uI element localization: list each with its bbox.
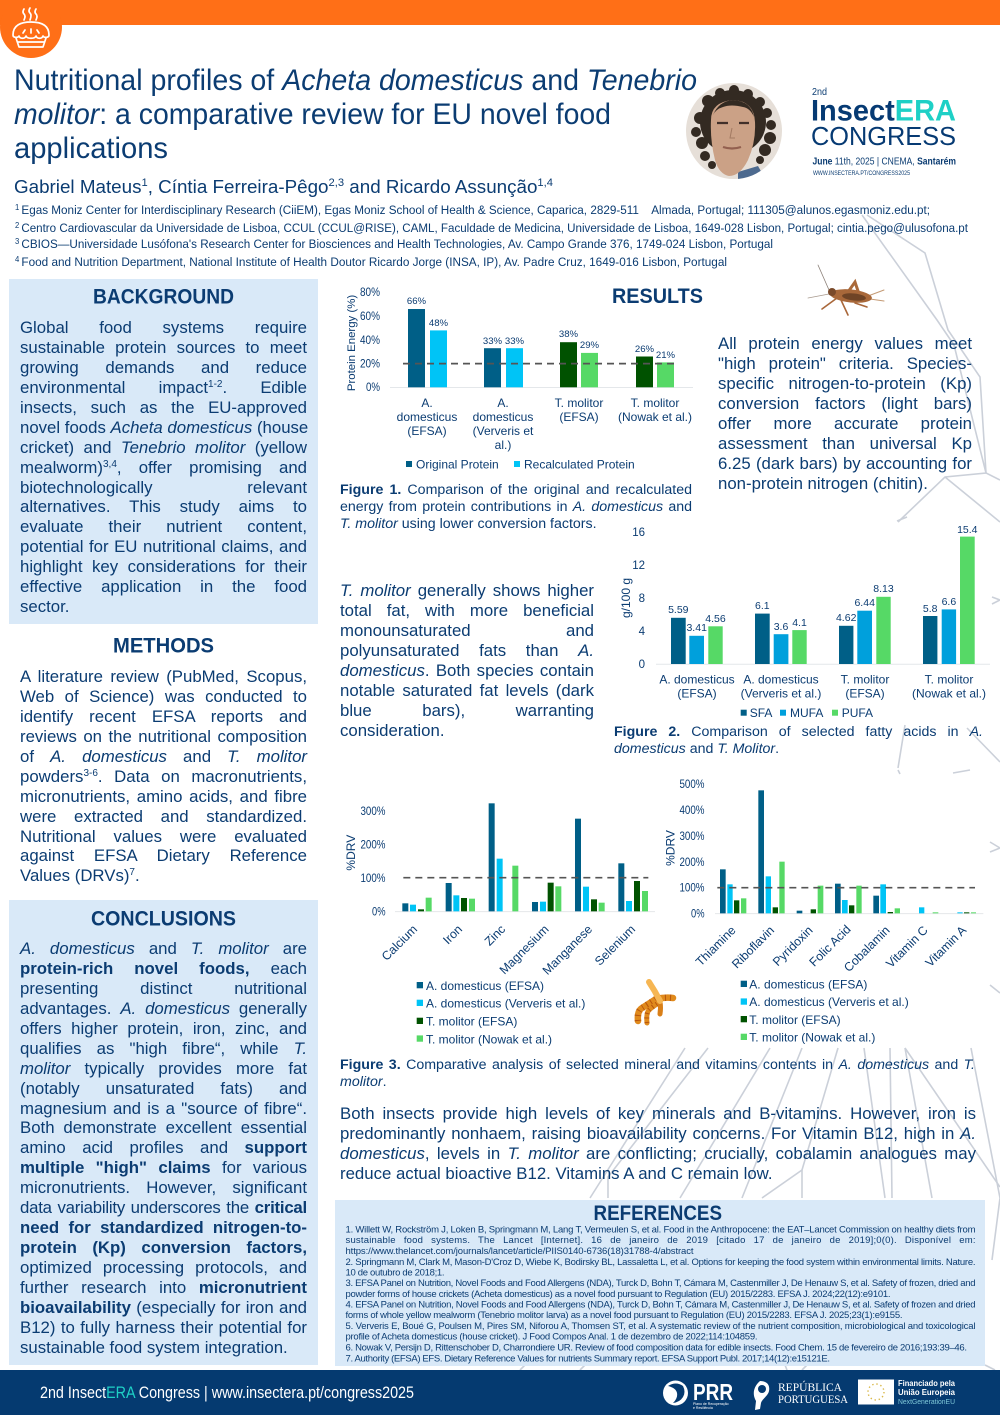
category labels: T. molitor (555, 396, 603, 410)
value labels: 26% (635, 344, 655, 355)
methods text: were extracted and standardized. (20, 807, 307, 826)
legend: Recalculated Protein (524, 458, 635, 472)
figure 1 caption (340, 482, 692, 532)
category labels: T. molitor (925, 672, 973, 686)
protein text: non-protein nitrogen (chitin). (718, 474, 928, 493)
category labels: Zinc (482, 922, 508, 949)
conclusions text: protein-rich novel foods, each (20, 959, 307, 978)
value labels: 6.44 (854, 597, 875, 609)
category labels: Folic Acid (807, 922, 854, 969)
conclusions text: A. domesticus and T. molitor are (20, 939, 307, 958)
conclusions text: need for standardized nitrogen-to- (20, 1218, 307, 1237)
bars (408, 309, 674, 387)
background text: growing demands and reduce (20, 358, 307, 377)
figure 1 caption: T. molitor using lower conversion factors. (340, 516, 597, 532)
legend: A. domesticus (Ververis et al.) (749, 995, 909, 1009)
conclusions text: advantages. A. domesticus generally (20, 999, 307, 1018)
fat text: blue bars), warranting (340, 701, 594, 720)
category labels (397, 396, 692, 452)
value labels: 29% (580, 340, 600, 351)
background text: biotechnologically relevant (20, 478, 307, 496)
category labels (659, 672, 986, 700)
chart: fatty acids (figure 2) (619, 524, 990, 720)
background text: Global food systems require (20, 318, 307, 337)
minerals and vitamins text: reduce actual bioactive B12. Vitamins A and C remain low. (340, 1164, 773, 1183)
protein text: assessment than universal Kp (718, 434, 972, 453)
background text: effective application in the food (20, 577, 307, 596)
protein text: "high protein" criteria. Species- (718, 354, 972, 373)
conclusions text: molitor typically provides more fat (20, 1059, 307, 1078)
category labels: al.) (495, 438, 511, 452)
affiliations: Centro Cardiovascular da Universidade de Lisboa, CCUL (CCUL@RISE), CAML, Faculdade de Medicina, Universidade de Lisboa, 1649-028 Lisbon, Portugal; cintia.pego@ulusofona.pt (21, 221, 969, 235)
references list: 10 de outubro de 2018;1. (346, 1268, 444, 1278)
references list: 3. EFSA Panel on Nutrition, Novel Foods and Food Allergens (NDA), Turck D, Bohn T, Cámara M, Castenmiller J, De Henauw S, et al. Safety of frozen, dried and (346, 1278, 976, 1289)
category labels: Riboflavin (729, 923, 777, 971)
panel: background (9, 279, 318, 624)
legend (741, 706, 873, 720)
fat text: T. molitor generally shows higher (340, 581, 594, 600)
references list (346, 1224, 976, 1364)
category labels: (Ververis et (473, 424, 534, 438)
references list: 6. Nowak V, Persijn D, Rittenschober D, Charrondiere UR. Review of food composition data for edible insects. Food Chem. 15 de fevereiro de 2016;193:39–46. (346, 1342, 967, 1354)
figure 2 caption (614, 724, 983, 757)
value labels: 6.1 (755, 600, 770, 612)
background text: sustainable protein sources to meet (20, 338, 307, 357)
background text: evaluate their nutrient content, (20, 517, 307, 536)
footer logos: NextGenerationEU (898, 1397, 955, 1406)
figure 3 caption: Figure 3. Comparative analysis of selected mineral and vitamins contents in A. domesticus and T. (340, 1057, 975, 1073)
category labels: (Ververis et al.) (741, 686, 821, 700)
methods heading: METHODS (113, 634, 214, 658)
conclusions text: data variability underscores the critical (20, 1198, 307, 1217)
top orange bar (0, 0, 1000, 25)
fat text: consideration. (340, 721, 444, 740)
authors (14, 176, 553, 197)
category labels: (EFSA) (845, 686, 885, 700)
icon: mealworms (634, 979, 676, 1026)
references list: 5. Ververis E, Boué G, Poulsen M, Pires SM, Niforou A, Thomsen ST, et al. A systematic review of the nutrient composition, microbiological and toxicological (346, 1321, 976, 1332)
figure 2 caption: domesticus and T. Molitor. (614, 741, 779, 757)
y axis labels: 100% (360, 871, 386, 885)
figure 1 caption: Figure 1. Comparison of the original and recalculated (340, 482, 692, 498)
conclusions text: sustainable food system integration. (20, 1338, 288, 1357)
category labels: (Nowak et al.) (912, 686, 986, 700)
y axis labels: 200% (360, 837, 386, 851)
legend (406, 458, 635, 472)
protein text: offer more accurate protein (718, 414, 972, 433)
congress logo: June 11th, 2025 | CNEMA, Santarém (812, 156, 956, 168)
legend: T. molitor (Nowak et al.) (749, 1030, 875, 1044)
footer logos: Financiado pela (898, 1379, 956, 1388)
background text: sector. (20, 597, 69, 616)
value labels (407, 296, 676, 361)
category labels: T. molitor (841, 672, 889, 686)
category labels: domesticus (397, 410, 457, 424)
affiliations: 3 (15, 237, 21, 246)
legend: A. domesticus (Ververis et al.) (426, 997, 585, 1011)
legend: MUFA (790, 706, 823, 720)
y axis labels: 40% (360, 335, 380, 347)
y axis title: %DRV (344, 835, 358, 871)
methods text: A literature review (PubMed, Scopus, (20, 667, 307, 686)
bars (720, 790, 976, 913)
icon: pie logo (0, 7, 62, 58)
references list: 2. Springmann M, Clark M, Mason-D'Croz D, Wiebe K, Bodirsky BL, Lassaletta L, et al. Options for keeping the food system within environmental limits. Nature. (346, 1257, 976, 1268)
conclusions text: amino acid profiles and support (20, 1138, 307, 1157)
y axis labels: 0% (691, 906, 705, 920)
authors: and Ricardo Assunção (344, 176, 537, 197)
legend (417, 979, 585, 1046)
conclusions text (19, 939, 307, 1357)
footer logos (663, 1379, 956, 1410)
y axis labels: 500% (680, 777, 705, 791)
fat text: notable saturated fat levels (dark (340, 681, 594, 700)
methods text: powders3-6. Data on macronutrients, (20, 767, 307, 786)
fat text: monounsaturated and (340, 621, 594, 640)
y axis labels: 300% (360, 804, 386, 818)
affiliations (15, 203, 969, 269)
affiliations: Food and Nutrition Department, National Institute of Health Doutor Ricardo Jorge (INSA, IP), Av. Padre Cruz, 1649-016 Lisbon, Portugal (21, 255, 727, 269)
y axis labels: 300% (680, 829, 705, 843)
footer logos: e Resiliência (693, 1406, 713, 1410)
references list: 1. Willett W, Rockström J, Loken B, Springmann M, Lang T, Vermeulen S, et al. Food in the Anthropocene: the EAT–Lancet Commission on healthy diets from (346, 1224, 976, 1236)
background text: insects, such as the EU-approved (20, 398, 307, 417)
y axis labels (360, 287, 380, 394)
category labels: (EFSA) (677, 686, 717, 700)
conclusions text: Both demonstrate excellent essential (20, 1118, 307, 1137)
value labels: 5.8 (923, 603, 938, 615)
y axis labels: 0% (372, 904, 386, 918)
footer text: 2nd InsectERA Congress | www.insectera.pt/congress2025 (40, 1384, 414, 1402)
category labels: (Nowak et al.) (618, 410, 692, 424)
background text: mealworm)3,4, offer promising and (20, 458, 307, 477)
category labels: (EFSA) (407, 424, 447, 438)
methods text: Nutritional values were evaluated (20, 826, 307, 846)
footer bar (0, 1370, 1000, 1415)
y axis labels (680, 777, 705, 920)
category labels: Calcium (379, 922, 420, 964)
legend: A. domesticus (EFSA) (749, 978, 867, 992)
conclusions text: B12) to fully harness their potential for (20, 1318, 307, 1337)
category labels: A. (421, 396, 433, 410)
conclusions text: bioavailability (especially for iron and (20, 1298, 307, 1317)
category labels: (EFSA) (559, 410, 599, 424)
y axis labels: 16 (632, 527, 645, 539)
fat text: total fat, with more beneficial (340, 601, 594, 620)
value labels: 8.13 (873, 583, 894, 595)
value labels: 15.4 (957, 524, 978, 536)
chart: minerals (figure 3 left) (344, 803, 655, 1046)
category labels: Magnesium (497, 922, 552, 977)
protein text: 6.25 (dark bars) by accounting for (718, 454, 972, 473)
methods text: reviews on the nutritional composition (20, 727, 307, 746)
conclusions text: presenting distinct nutritional (20, 979, 307, 998)
conclusions text: offers higher protein, iron, zinc, and (20, 1019, 307, 1038)
y axis title: %DRV (664, 830, 678, 866)
y axis title: Protein Energy (%) (346, 295, 358, 391)
legend: A. domesticus (EFSA) (426, 979, 544, 993)
y axis labels: 12 (632, 560, 645, 572)
title (14, 64, 697, 165)
background text: alternatives. This study aims to (20, 497, 307, 516)
bars (402, 803, 648, 911)
value labels: 6.6 (942, 596, 956, 608)
methods text (20, 667, 308, 885)
methods text: Web of Science) was conducted to (20, 687, 307, 706)
conclusions text: qualifies as "high fibre“, while T. (20, 1039, 307, 1058)
legend: T. molitor (Nowak et al.) (426, 1032, 552, 1046)
value labels: 48% (429, 318, 449, 329)
y axis labels: 200% (680, 855, 705, 869)
portrait photo (686, 83, 782, 179)
background text: highlight key considerations for their (20, 557, 307, 576)
references heading: REFERENCES (594, 1202, 722, 1225)
category labels (379, 922, 638, 978)
congress logo: CONGRESS (811, 121, 956, 151)
value labels: 21% (656, 350, 676, 361)
bars (671, 537, 975, 664)
authors: 2,3 (329, 177, 344, 189)
value labels: 4.1 (792, 617, 807, 629)
background text: novel foods Acheta domesticus (house (20, 418, 308, 437)
value labels (668, 524, 978, 634)
figure 2 caption: Figure 2. Comparison of selected fatty acids in A. (614, 724, 983, 740)
y axis labels: 0% (366, 382, 380, 394)
congress logo: InsectERA (811, 95, 956, 128)
minerals and vitamins text: domesticus, levels in T. molitor are conflicting; crucially, cobalamin analogues may (340, 1144, 976, 1163)
y axis labels (632, 527, 646, 671)
fat text: polyunsaturated fats than A. (340, 641, 594, 660)
y axis labels: 100% (680, 881, 705, 895)
minerals and vitamins text (340, 1104, 976, 1183)
category labels: Pyridoxin (770, 923, 816, 969)
value labels: 66% (407, 296, 427, 307)
category labels (693, 922, 970, 975)
value labels: 4.56 (705, 613, 726, 625)
references list: powder forms of house crickets (Acheta domesticus) as a novel food pursuant to Regulation (EU) 2015/2283. EFSA J. 2024;22(12):e9101. (346, 1289, 890, 1300)
affiliations: CBIOS—Universidade Lusófona's Research Center for Biosciences and Health Technologies, Av. Campo Grande 376, 1749-024 Lisbon, Portugal (21, 237, 773, 251)
minerals and vitamins text: Both insects provide high levels of key minerals and B-vitamins. However, iron is (340, 1104, 976, 1123)
conclusions text: (notably unsaturated fats) and (20, 1079, 307, 1098)
value labels: 38% (559, 329, 579, 340)
footer logos: PORTUGUESA (778, 1392, 848, 1406)
authors: Gabriel Mateus (14, 176, 139, 197)
y axis title: g/100 g (619, 578, 633, 618)
legend: T. molitor (EFSA) (749, 1013, 841, 1027)
category labels: Iron (440, 922, 465, 947)
authors: 1,4 (537, 177, 553, 189)
results heading: RESULTS (612, 285, 703, 308)
references list: profile of Acheta domesticus (house cricket). J Food Compos Anal. 1 de dezembro de 2022;114:104859. (346, 1332, 758, 1342)
y axis labels: 0 (639, 659, 645, 671)
figure 3 caption: molitor. (340, 1074, 387, 1090)
legend: Original Protein (416, 458, 499, 472)
footer logos: REPÚBLICA (778, 1380, 842, 1394)
y axis labels: 4 (639, 626, 646, 638)
references list: forms of whole yellow mealworm (Tenebrio molitor larva) as a novel food pursuant to Regulation (EU) 2015/2283. EFSA J. 2025;23(1):e9155. (346, 1310, 902, 1321)
references list: https://www.thelancet.com/journals/lancet/article/PIIS0140-6736(18)31788-4/abstract (346, 1246, 694, 1257)
title: applications (14, 132, 168, 165)
legend: T. molitor (EFSA) (426, 1015, 517, 1029)
authors: 1 (142, 177, 148, 189)
legend: SFA (750, 706, 772, 720)
category labels: T. molitor (631, 396, 679, 410)
y axis labels: 400% (680, 803, 705, 817)
background text: potential for EU nutritional claims, and (20, 537, 307, 556)
value labels: 4.62 (836, 612, 857, 624)
conclusions text: protein (Kp) conversion factors, (20, 1238, 307, 1257)
y axis labels (360, 804, 386, 918)
methods text: Values (DRVs)7. (20, 866, 140, 885)
category labels: A. domesticus (659, 672, 735, 686)
background text (20, 318, 308, 616)
fat text: domesticus. Both species contain (340, 661, 594, 680)
congress logo: 2nd (812, 87, 827, 98)
icon: cricket (808, 264, 884, 316)
references list: sustainable food systems. The Lancet [Internet]. 16 de janeiro de 2019 [citado 17 de janeiro de 2019];0(0). Disponível em: (346, 1235, 976, 1246)
chart: vitamins (figure 3 right) (664, 777, 984, 1044)
panel: references (335, 1200, 985, 1366)
affiliations: 4 (15, 255, 21, 264)
title: Nutritional profiles of Acheta domesticus and Tenebrio (14, 64, 697, 97)
references list: 7. Authority (EFSA) EFS. Dietary Reference Values for nutrients Summary report. EFSA Support Publ. 2017;14(12):e15121E. (346, 1354, 830, 1364)
fat text (340, 581, 594, 740)
authors: , Cíntia Ferreira-Pêgo (148, 176, 329, 197)
y axis labels: 60% (360, 311, 380, 323)
minerals and vitamins text: predominantly nonhaem, raising bioavailability concerns. For Vitamin B12, high in A. (340, 1124, 976, 1143)
category labels: Vitamin A (923, 923, 970, 970)
value labels: 3.6 (774, 621, 788, 633)
methods text: micronutrients, amino acids, and fibre (20, 787, 307, 806)
congress logo: WWW.INSECTERA.PT/CONGRESS2025 (813, 171, 911, 177)
background text: environmental impact1-2. Edible (20, 378, 307, 397)
methods text: identify recent EFSA reports and (20, 707, 307, 726)
conclusions text: magnesium and is a "source of fibre“. (20, 1098, 307, 1118)
conclusions text: micronutrients. However, significant (20, 1178, 307, 1197)
methods text: against EFSA Dietary Reference (20, 846, 307, 865)
category labels: Selenium (592, 922, 638, 968)
category labels: Thiamine (693, 923, 739, 969)
value labels: 5.59 (668, 604, 689, 616)
value labels: 3.41 (686, 622, 707, 634)
protein text (718, 334, 972, 493)
category labels: A. (497, 396, 509, 410)
category labels: Manganese (540, 922, 595, 978)
references list: 4. EFSA Panel on Nutrition, Novel Foods and Food Allergens (NDA), Turck D, Bohn T, Cámara M, Castenmiller J, De Henauw S, et al. Safety of frozen and dried (346, 1300, 976, 1310)
conclusions text: optimized processing protocols, and (20, 1258, 307, 1277)
conclusions text: multiple "high" claims for various (20, 1158, 307, 1177)
value labels: 33% (505, 336, 525, 347)
background heading: BACKGROUND (93, 286, 234, 308)
protein text: All protein energy values meet (718, 334, 972, 353)
affiliations: 1 (15, 203, 21, 212)
congress logo (811, 87, 956, 177)
conclusions text: further research into micronutrient (20, 1278, 307, 1297)
conclusions heading: CONCLUSIONS (91, 908, 236, 930)
title: molitor: a comparative review for EU novel food (14, 98, 611, 131)
category labels: domesticus (473, 410, 533, 424)
legend (741, 978, 909, 1044)
figure 3 caption (340, 1057, 975, 1090)
affiliations: 2 (15, 221, 21, 230)
category labels: Cobalamin (841, 923, 893, 975)
legend: PUFA (842, 706, 873, 720)
footer logos: Plano de Recuperação (693, 1402, 729, 1406)
y axis labels: 8 (639, 593, 645, 605)
chart: protein energy (figure 1) (346, 287, 693, 472)
value labels: 33% (483, 336, 503, 347)
y axis labels: 80% (360, 287, 380, 299)
panel: conclusions (9, 900, 318, 1365)
protein text: specific nitrogen-to-protein (Kp) (718, 374, 972, 393)
category labels: Vitamin C (883, 923, 931, 971)
affiliations: Egas Moniz Center for Interdisciplinary Research (CiiEM), Egas Moniz School of Health & Science, Caparica, 2829-511 Almada, Portugal; 111305@alunos.egasmoniz.edu.pt; (21, 203, 930, 217)
protein text: conversion factors (light bars) (718, 394, 972, 413)
figure 1 caption: energy from protein contributions in A. domesticus and (340, 499, 692, 515)
background text: cricket) and Tenebrio molitor (yellow (20, 438, 307, 457)
category labels: A. domesticus (743, 672, 819, 686)
methods text: of A. domesticus and T. molitor (20, 747, 307, 766)
y axis labels: 20% (360, 358, 380, 370)
footer logos: União Europeia (898, 1388, 956, 1397)
footer logos: PRR (693, 1379, 733, 1405)
